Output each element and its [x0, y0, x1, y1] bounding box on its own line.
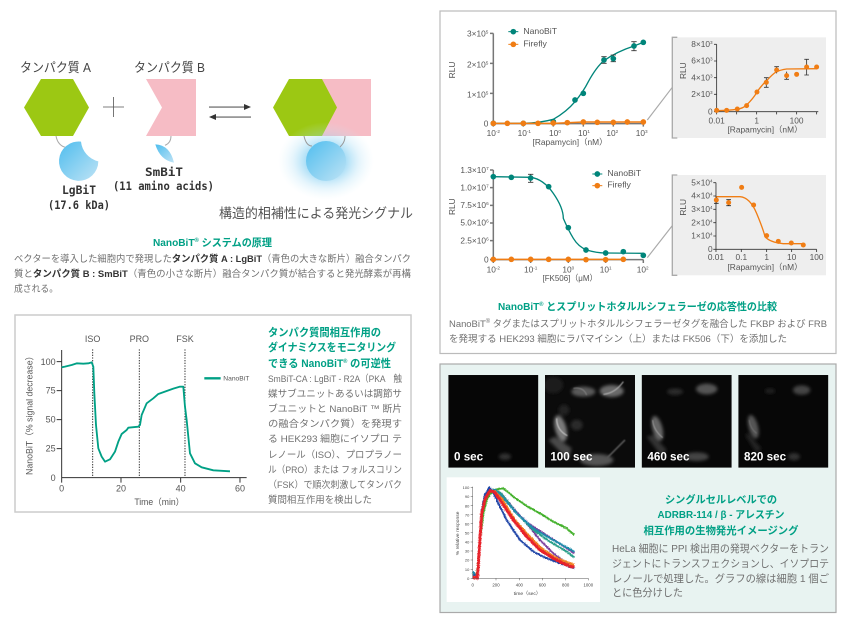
heading: comparison: ®	[539, 301, 544, 308]
dose response chart: rapamycin: -1	[527, 129, 531, 134]
inset chart: firefly FK506: 100	[810, 252, 824, 262]
dose response chart: FK506: -1	[533, 265, 538, 270]
text block: single cell imaging description: レノールで処理した。グラフの線は細胞 1 個ご	[612, 572, 829, 585]
inset chart: firefly rapamycin: 4×10	[691, 72, 710, 82]
line chart: single cell response curves: % relative response	[455, 511, 461, 555]
inset chart: firefly FK506	[672, 175, 826, 275]
dose response chart: FK506: 10	[600, 264, 609, 274]
line chart: single cell response curves: 80	[465, 503, 470, 508]
dose response chart: rapamycin: 10	[518, 128, 527, 138]
inset chart: firefly FK506: 0	[708, 244, 713, 254]
dose response chart: rapamycin: NanoBiT	[523, 26, 558, 36]
dose response chart: FK506: 2	[646, 265, 649, 270]
heading: comparison: とスプリットホタルルシフェラーゼの応答性の比較	[543, 300, 777, 313]
dose response chart: rapamycin: -2	[496, 129, 500, 134]
photo: 820 sec: 820 sec	[744, 451, 787, 464]
icon: assembled luminescent complex	[273, 79, 374, 200]
line chart: single cell response curves: 60	[465, 521, 470, 526]
label: SmBiT size	[113, 165, 214, 193]
dose response chart: rapamycin: 2	[616, 129, 619, 134]
dose response chart: FK506: [FK506]（μM）	[542, 273, 597, 283]
text block: reversibility description: ル（PRO）または フォルスコリン	[268, 464, 402, 476]
dose response chart: rapamycin: 5	[486, 30, 489, 35]
label: LgBiT size	[48, 183, 110, 212]
line chart: NanoBiT time course: NanoBiT	[223, 376, 249, 383]
line chart: single cell response curves: 200	[492, 582, 500, 587]
inset chart: firefly rapamycin: 2×10	[691, 89, 710, 99]
label: structural complementation signal: 構造的相補性による発光シグナル	[219, 206, 413, 221]
inset chart: firefly rapamycin: 3	[710, 73, 713, 78]
dose response chart: rapamycin: 0	[484, 119, 489, 129]
label: LgBiT size: (17.6 kDa)	[48, 198, 110, 212]
dose response chart: FK506: 5.0×10	[460, 218, 486, 228]
label: protein A: タンパク質 A	[20, 60, 91, 75]
icon: green hexagon protein A	[24, 79, 89, 136]
panel: single cell bioluminescence imaging	[440, 364, 836, 612]
text block: comparison description: NanoBiT	[449, 319, 486, 330]
text block: reversibility description	[268, 373, 402, 506]
text block: comparison description: ®	[486, 318, 491, 325]
dose response chart: FK506: 7.5×10	[460, 200, 486, 210]
dose response chart: FK506: 1.3×10	[460, 165, 486, 175]
text block: reversibility description: の融合タンパク質）を発現す	[268, 418, 402, 430]
inset chart: firefly rapamycin: 6×10	[691, 56, 710, 66]
line chart: NanoBiT time course: PRO	[130, 334, 149, 344]
dose response chart: rapamycin: 10	[549, 128, 558, 138]
line chart: single cell response curves: 0	[471, 582, 474, 587]
inset chart: firefly FK506: 2×10	[691, 217, 710, 227]
icon: SmBiT fragment with linker	[155, 136, 174, 163]
line chart: single cell response curves: 1000	[583, 582, 594, 587]
dose response chart: rapamycin	[447, 26, 672, 147]
dose response chart: FK506: 7	[486, 166, 489, 171]
text block: comparison description: タグまたはスプリットホタルルシフェラーゼタグを融合した FKBP および FRB	[490, 318, 827, 330]
dose response chart: FK506: 0	[572, 265, 575, 270]
dose response chart: rapamycin: 10	[636, 128, 645, 138]
line chart: single cell response curves: 400	[516, 582, 524, 587]
inset chart: firefly rapamycin: 100	[790, 115, 804, 125]
inset chart: firefly rapamycin: RLU	[678, 62, 688, 79]
dose response chart: FK506: 10	[562, 264, 572, 274]
text block: principle description	[14, 253, 411, 295]
text block: single cell imaging description	[612, 542, 829, 599]
heading: NanoBiT system principle: NanoBiT	[153, 237, 196, 249]
dose response chart: FK506: 10	[524, 264, 533, 274]
text block: principle description: 成される。	[14, 283, 58, 295]
dose response chart: rapamycin: 10	[606, 128, 616, 138]
icon: equilibrium arrows	[209, 104, 251, 120]
label: protein B: タンパク質 B	[134, 60, 205, 75]
line chart: NanoBiT time course: 0	[51, 473, 56, 483]
dose response chart: FK506: 6	[486, 236, 489, 241]
inset chart: firefly FK506: 3×10	[691, 204, 710, 214]
inset chart: firefly rapamycin: 0	[708, 106, 713, 116]
inset chart: firefly rapamycin: [Rapamycin]（nM）	[727, 125, 802, 135]
text block: principle description: 質とタンパク質 B : SmBiT（青色の小さな断片）融合タンパク質が結合すると発光酵素が再構	[14, 268, 411, 280]
heading: NanoBiT system principle: システムの原理	[199, 237, 272, 249]
dose response chart: FK506: 10	[637, 264, 646, 274]
line chart: single cell response curves: 600	[539, 582, 547, 587]
line chart: single cell response curves: 70	[465, 512, 470, 517]
inset chart: firefly rapamycin: 3	[710, 90, 713, 95]
heading: single cell imaging: シングルセルレベルでの	[665, 493, 777, 506]
label: LgBiT size: LgBiT	[62, 183, 96, 197]
heading: reversibility: できる NanoBiT	[268, 358, 349, 370]
inset chart: firefly rapamycin: 1	[754, 115, 759, 125]
line chart: single cell response curves: 40	[465, 540, 470, 545]
text block: reversibility description: （FSK）で順次刺激してタンパク	[268, 479, 402, 491]
text block: reversibility description: レノール（ISO）、プロプラノー	[268, 449, 402, 461]
text block: single cell imaging description: ジェントにトランスフェクションし、イソプロテ	[612, 558, 829, 570]
dose response chart: FK506: 2.5×10	[460, 235, 486, 245]
heading: reversibility: タンパク質間相互作用の	[268, 325, 381, 339]
panel: NanoBiT system principle	[14, 60, 413, 295]
heading: single cell imaging: 相互作用の生物発光イメージング	[644, 524, 799, 537]
inset chart: firefly FK506: 10	[787, 252, 797, 262]
inset chart: firefly FK506: 4	[710, 205, 713, 210]
dose response chart: rapamycin: Firefly	[523, 39, 548, 49]
line chart: NanoBiT time course: 20	[116, 484, 126, 494]
dose response chart: FK506: 6	[486, 219, 489, 224]
dose response chart: FK506: 1.0×10	[460, 182, 486, 192]
dose response chart: rapamycin: 10	[487, 128, 496, 138]
dose response chart: rapamycin: 5	[486, 90, 489, 95]
inset chart: firefly FK506: 0.01	[708, 252, 724, 262]
inset chart: firefly FK506: 4	[710, 232, 713, 237]
line chart: NanoBiT time course: 25	[46, 444, 56, 454]
dose response chart: rapamycin: 3×10	[467, 29, 486, 39]
dose response chart: FK506: 0	[484, 254, 489, 264]
dose response chart: rapamycin: 5	[486, 60, 489, 65]
line chart: single cell response curves: 0	[467, 576, 470, 581]
text block: reversibility description: SmBiT-CA : LgBiT - R2A（PKA 触	[268, 373, 402, 385]
line chart: single cell response curves: 800	[562, 582, 570, 587]
inset chart: firefly rapamycin: 3	[710, 57, 713, 62]
text block: comparison description: を発現する HEK293 細胞にラパマイシン（上）または FK506（下）を添加した	[449, 333, 787, 345]
dose response chart: FK506: 7	[486, 183, 489, 188]
panel: comparison with split firefly luciferase	[440, 11, 836, 354]
text block: single cell imaging description: HeLa 細胞に PPI 検出用の発現ベクターをトラン	[612, 542, 829, 555]
line chart: NanoBiT time course	[25, 334, 249, 507]
dose response chart: FK506: 1	[609, 265, 612, 270]
icon: pink protein B	[146, 79, 196, 136]
dose response chart: FK506: NanoBiT	[607, 168, 642, 178]
line chart: single cell response curves	[447, 477, 600, 602]
photo: 100 sec	[545, 375, 635, 468]
dose response chart: rapamycin: [Rapamycin]（nM）	[532, 137, 607, 147]
photo: 820 sec	[738, 375, 828, 468]
text block: comparison description	[449, 318, 827, 345]
label: SmBiT size: (11 amino acids)	[113, 179, 214, 193]
line chart: single cell response curves: 30	[465, 549, 470, 554]
text block: reversibility description: ブユニットと NanoBiT ™ 断片	[268, 403, 402, 415]
text block: reversibility description: 媒サブユニットあるいは調節サ	[268, 388, 402, 400]
line chart: NanoBiT time course: NanoBiT（% signal decrease）	[25, 352, 35, 475]
line chart: NanoBiT time course: 0	[59, 484, 64, 494]
text block: reversibility description: る HEK293 細胞にイソプロ テ	[268, 433, 402, 445]
label: SmBiT size: SmBiT	[145, 165, 183, 179]
inset chart: firefly FK506: [Rapamycin]（nM）	[727, 262, 802, 272]
dose response chart: rapamycin: 1×10	[467, 89, 486, 99]
dose response chart: FK506: -2	[496, 265, 500, 270]
photo: 460 sec	[642, 375, 732, 468]
inset chart: firefly rapamycin	[672, 37, 826, 138]
photo: 0 sec	[448, 375, 538, 468]
line chart: single cell response curves: 20	[465, 558, 470, 563]
dose response chart: FK506: 6	[486, 201, 489, 206]
text block: reversibility description: 質間相互作用を検出した	[268, 494, 372, 506]
inset chart: firefly rapamycin: 8×10	[691, 39, 710, 49]
inset chart: firefly FK506: 5×10	[691, 177, 710, 187]
inset chart: firefly rapamycin: 0.01	[709, 115, 725, 125]
heading: reversibility: ダイナミクスをモニタリング	[268, 340, 396, 354]
photo: 0 sec: 0 sec	[454, 451, 484, 464]
icon: plus sign	[103, 97, 124, 117]
line chart: single cell response curves: 90	[465, 494, 470, 499]
line chart: NanoBiT time course: 40	[176, 484, 186, 494]
icon: LgBiT fragment with linker	[56, 136, 98, 181]
line chart: single cell response curves: 10	[465, 567, 470, 572]
line chart: NanoBiT time course: ISO	[85, 334, 100, 344]
dose response chart: rapamycin: RLU	[447, 62, 457, 78]
dose response chart: rapamycin: 1	[587, 129, 590, 134]
inset chart: firefly FK506: 4	[710, 218, 713, 223]
inset chart: firefly rapamycin: 3	[710, 40, 713, 45]
photo: 100 sec: 100 sec	[550, 451, 593, 464]
line chart: NanoBiT time course: 50	[46, 415, 56, 425]
inset chart: firefly FK506: 4	[710, 178, 713, 183]
line chart: single cell response curves: 50	[465, 530, 470, 535]
text block: single cell imaging description: とに色分けした	[612, 587, 683, 599]
line chart: NanoBiT time course: 100	[41, 357, 56, 367]
inset chart: firefly FK506: 4×10	[691, 191, 710, 201]
inset chart: firefly FK506: RLU	[678, 199, 688, 216]
inset chart: firefly FK506: 1	[764, 252, 769, 262]
heading: comparison: NanoBiT	[498, 301, 541, 313]
line chart: NanoBiT time course: FSK	[176, 334, 194, 344]
inset chart: firefly FK506: 1×10	[691, 231, 710, 241]
dose response chart: FK506: Firefly	[607, 180, 632, 190]
text block: principle description: ベクターを導入した細胞内で発現したタンパク質 A : LgBiT（青色の大きな断片）融合タンパク	[14, 253, 411, 265]
dose response chart: rapamycin: 0	[558, 129, 561, 134]
dose response chart: FK506	[447, 165, 672, 283]
line chart: NanoBiT time course: 60	[235, 484, 245, 494]
panel: reversibility chart	[15, 315, 411, 512]
heading: reversibility: ®	[343, 358, 348, 365]
heading: single cell imaging	[644, 493, 799, 537]
photo: 460 sec: 460 sec	[647, 451, 690, 464]
line chart: NanoBiT time course: 75	[46, 385, 56, 395]
line chart: single cell response curves: time（sec）	[514, 591, 541, 597]
dose response chart: FK506: RLU	[447, 198, 457, 215]
dose response chart: rapamycin: 3	[645, 129, 648, 134]
dose response chart: FK506: 10	[487, 264, 496, 274]
inset chart: firefly FK506: 0.1	[736, 252, 747, 262]
line chart: NanoBiT time course: Time（min）	[134, 497, 184, 507]
inset chart: firefly FK506: 4	[710, 192, 713, 197]
line chart: single cell response curves: 100	[463, 485, 470, 490]
heading: reversibility	[268, 325, 396, 370]
dose response chart: rapamycin: 10	[578, 128, 587, 138]
heading: single cell imaging: ADRBR-114 / β - アレスチン	[658, 509, 784, 521]
heading: NanoBiT system principle: ®	[195, 237, 199, 244]
dose response chart: rapamycin: 2×10	[467, 59, 486, 69]
heading: reversibility: の可逆性	[347, 356, 391, 370]
